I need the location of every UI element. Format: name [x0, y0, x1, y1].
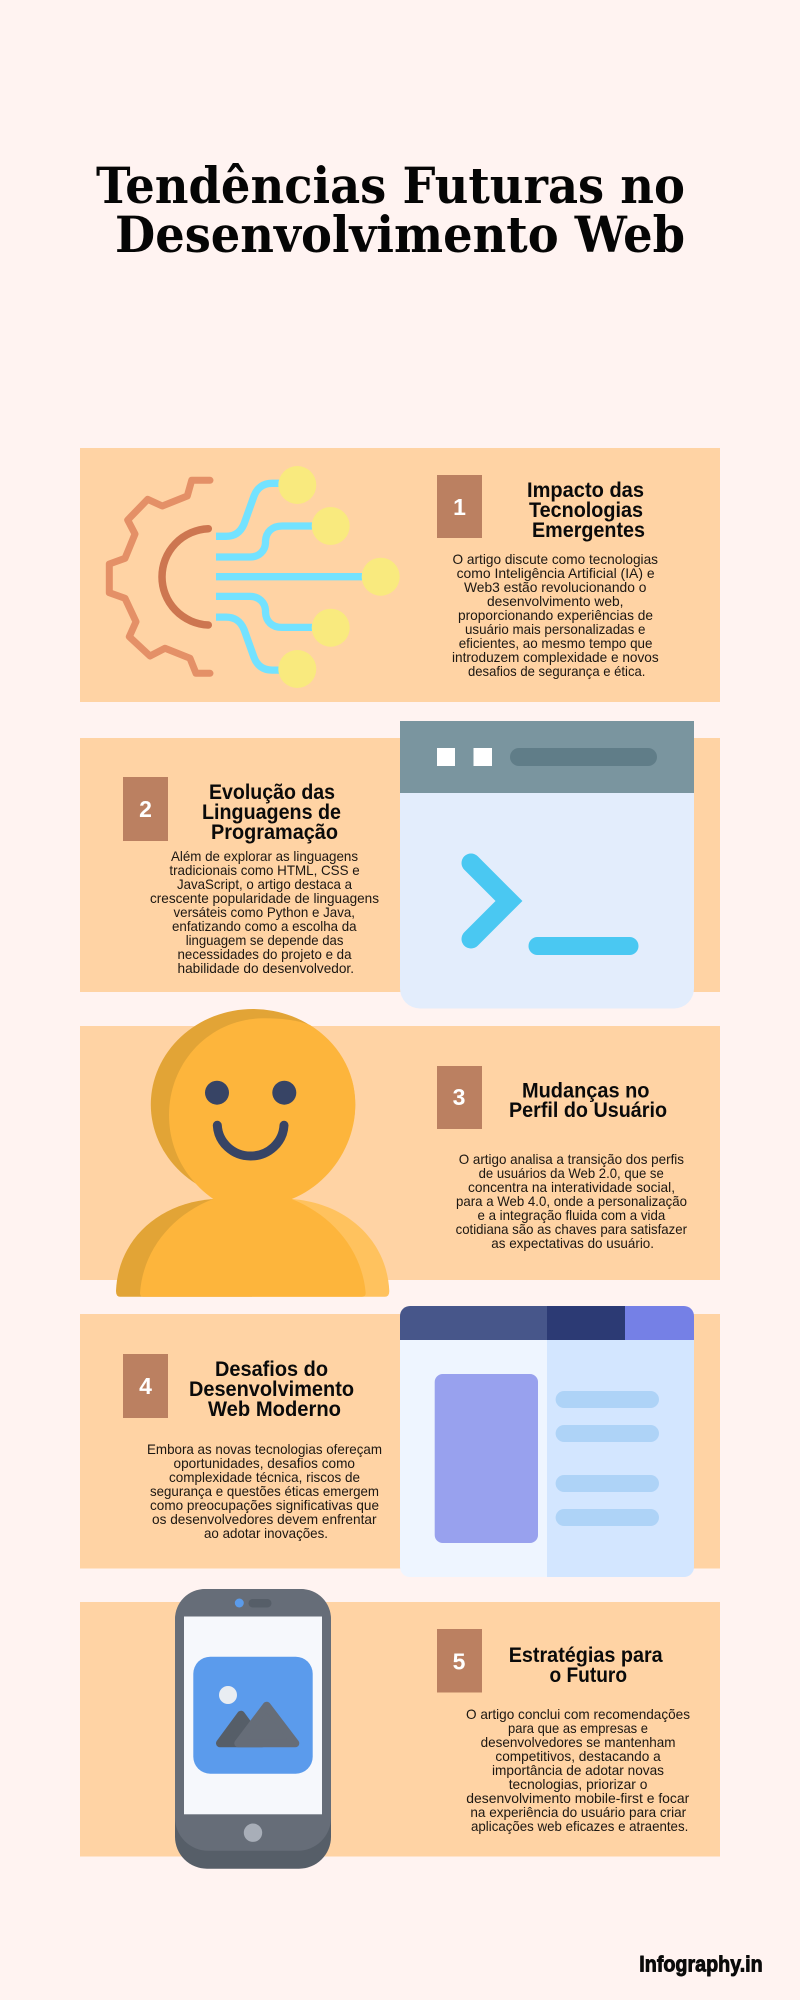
text block 2: habilidade do desenvolvedor.	[178, 960, 354, 976]
text block 2: versáteis como Python e Java,	[174, 904, 355, 920]
number badge 5: 5	[453, 1648, 466, 1674]
heading 1: Tecnologias	[529, 499, 643, 522]
icon: smiling user	[116, 1009, 389, 1297]
text block 1: introduzem complexidade e novos	[452, 649, 659, 665]
text block 2	[150, 848, 379, 976]
text block 2: tradicionais como HTML, CSS e	[169, 862, 360, 878]
text block 3: as expectativas do usuário.	[491, 1235, 654, 1251]
icon: gear with circuit nodes	[109, 466, 400, 688]
heading 2	[202, 781, 341, 844]
number badge 5	[437, 1629, 482, 1692]
icon: layout window	[400, 1306, 694, 1577]
text block 4: segurança e questões éticas emergem	[150, 1483, 379, 1499]
text block 2: linguagem se depende das	[186, 932, 343, 948]
text block 4: oportunidades, desafios como	[174, 1455, 355, 1471]
text block 5: competitivos, destacando a	[495, 1748, 661, 1764]
text block 5: desenvolvimento mobile-first e focar	[466, 1790, 690, 1806]
text block 2: crescente popularidade de linguagens	[150, 890, 379, 906]
panel: 3 Mudanças no Perfil do Usuário	[80, 1026, 720, 1280]
text block 3: para a Web 4.0, onde a personalização	[456, 1193, 687, 1209]
number badge 3: 3	[453, 1084, 465, 1110]
text block 4: ao adotar inovações.	[204, 1525, 328, 1541]
text block 2: Além de explorar as linguagens	[171, 848, 358, 864]
panel: 2 Evolução das Linguagens de Programação	[80, 738, 720, 992]
text block 4: Embora as novas tecnologias ofereçam	[147, 1441, 382, 1457]
heading 1	[527, 479, 645, 542]
heading 2: Linguagens de	[202, 801, 341, 824]
title	[96, 156, 685, 264]
heading 1: Impacto das	[527, 479, 644, 502]
text block 1: usuário mais personalizadas e	[465, 621, 646, 637]
text block 5: aplicações web eficazes e atraentes.	[471, 1818, 688, 1834]
text block 5: na experiência do usuário para criar	[470, 1804, 687, 1820]
text block 1: desafios de segurança e ética.	[468, 663, 645, 679]
number badge 2	[123, 777, 168, 841]
text block 4: como preocupações significativas que	[150, 1497, 379, 1513]
text block 3	[456, 1151, 687, 1251]
text block 3: e a integração fluida com a vida	[478, 1207, 665, 1223]
heading 3: Perfil do Usuário	[509, 1099, 667, 1122]
heading 1: Emergentes	[532, 519, 645, 542]
number badge 1	[437, 475, 482, 538]
text block 3: de usuários da Web 2.0, que se	[479, 1165, 664, 1181]
heading 2: Programação	[211, 821, 338, 844]
text block 1: eficientes, ao mesmo tempo que	[459, 635, 653, 651]
text block 4: os desenvolvedores devem enfrentar	[152, 1511, 377, 1527]
text block 3: O artigo analisa a transição dos perfis	[459, 1151, 684, 1167]
text block 3: concentra na interatividade social,	[468, 1179, 675, 1195]
text block 2: necessidades do projeto e da	[178, 946, 352, 962]
text block 4: complexidade técnica, riscos de	[169, 1469, 360, 1485]
heading 4: Desafios do	[215, 1358, 328, 1381]
heading 4	[189, 1358, 354, 1421]
title: Tendências Futuras no	[96, 156, 685, 215]
text block 2: JavaScript, o artigo destaca a	[177, 876, 352, 892]
heading 4: Web Moderno	[208, 1398, 341, 1421]
text block 1: desenvolvimento web,	[487, 593, 624, 609]
heading 5	[509, 1644, 663, 1687]
text block 5: tecnologias, priorizar o	[509, 1776, 648, 1792]
panel: 1 Impacto das Tecnologias Emergentes	[80, 448, 720, 702]
text block 1	[452, 551, 659, 679]
heading 2: Evolução das	[209, 781, 335, 804]
number badge 3	[437, 1066, 482, 1129]
heading 5: Estratégias para	[509, 1644, 663, 1667]
title: Desenvolvimento Web	[115, 205, 685, 264]
heading 5: o Futuro	[550, 1664, 627, 1687]
number badge 4	[123, 1354, 168, 1418]
text block 5: importância de adotar novas	[492, 1762, 664, 1778]
heading 3	[509, 1080, 667, 1122]
text block 1: proporcionando experiências de	[458, 607, 653, 623]
text block 2: enfatizando como a escolha da	[172, 918, 357, 934]
text block 1: Web3 estão revolucionando o	[464, 579, 647, 595]
heading 3: Mudanças no	[522, 1080, 650, 1102]
text block 1: O artigo discute como tecnologias	[452, 551, 658, 567]
icon: terminal window	[400, 721, 694, 1009]
panel: 5 Estratégias para o Futuro	[80, 1602, 720, 1856]
text block 4	[147, 1441, 382, 1541]
number badge 4: 4	[139, 1373, 152, 1399]
heading 4: Desenvolvimento	[189, 1378, 354, 1401]
text block 5: desenvolvedores se mantenham	[481, 1734, 676, 1750]
text block 5	[466, 1706, 690, 1834]
text block 3: cotidiana são as chaves para satisfazer	[456, 1221, 687, 1237]
number badge 1: 1	[453, 494, 466, 520]
number badge 2: 2	[139, 796, 152, 822]
text block 1: como Inteligência Artificial (IA) e	[457, 565, 655, 581]
panel: 4 Desafios do Desenvolvimento Web Moderno	[80, 1314, 720, 1568]
text block 5: para que as empresas e	[508, 1720, 648, 1736]
footer brand: Infography.in	[639, 1952, 763, 1977]
icon: smartphone with image	[175, 1589, 331, 1869]
text block 5: O artigo conclui com recomendações	[466, 1706, 690, 1722]
